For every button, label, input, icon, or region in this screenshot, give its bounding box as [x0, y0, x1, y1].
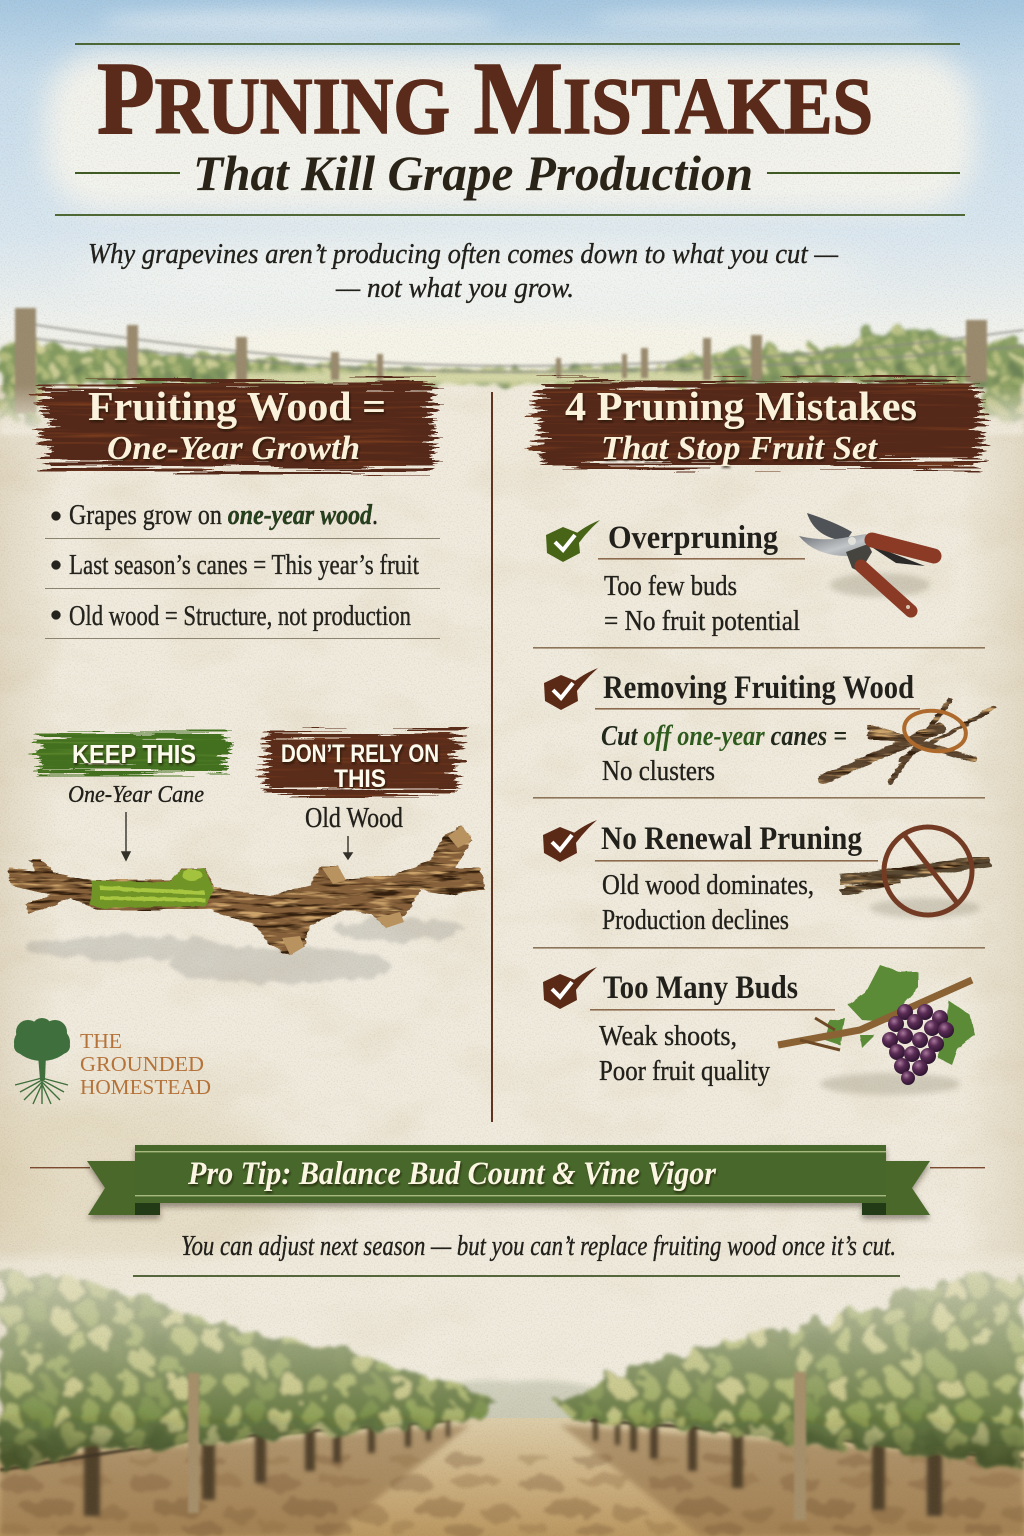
mistake 3: no renewal pruning: Old wood dominates, — [602, 870, 814, 901]
mistake 4: too many buds: Poor fruit quality — [599, 1056, 770, 1087]
illustration: branch with cane and old wood — [8, 826, 485, 983]
mistake 3: no renewal pruning: Production declines — [602, 905, 789, 936]
mistake 4: too many buds: Weak shoots, — [599, 1021, 737, 1052]
mistake 2: removing fruiting wood — [533, 668, 994, 799]
icon: tree — [14, 1018, 70, 1104]
banner: 4 pruning mistakes — [538, 382, 980, 467]
intro text: — not what you grow. — [335, 272, 574, 304]
bottom vineyard scene — [0, 1250, 1024, 1536]
label: one-year cane: One-Year Cane — [68, 782, 204, 808]
banner: fruiting wood: One-Year Growth — [107, 430, 360, 467]
arrow: to old wood — [344, 836, 352, 859]
centre divider — [491, 392, 493, 1122]
logo: the grounded homestead: HOMESTEAD — [80, 1075, 211, 1099]
mistake 4: too many buds: Too Many Buds — [603, 970, 798, 1006]
mistake 2: removing fruiting wood: Cut off one-year canes = — [601, 721, 847, 752]
mistake 2: removing fruiting wood: No clusters — [602, 756, 715, 787]
tag: keep this: KEEP THIS — [72, 739, 196, 769]
trellis wires — [0, 1420, 1024, 1470]
distant vines — [0, 325, 1024, 420]
trunks — [60, 1398, 972, 1516]
far hills — [420, 1380, 610, 1425]
icon: green check — [546, 520, 600, 562]
banner: fruiting wood: Fruiting Wood = — [88, 383, 386, 429]
logo: the grounded homestead: GROUNDED — [80, 1052, 204, 1076]
label: old wood: Old Wood — [305, 803, 403, 834]
tag: don't rely on this: THIS — [334, 765, 386, 793]
mistake 1: overpruning: = No fruit potential — [604, 606, 800, 637]
bullet list: Last season’s canes = This year’s fruit — [69, 550, 419, 581]
ground — [0, 1418, 1024, 1536]
mistake 2: removing fruiting wood: Removing Fruiting Wood — [603, 670, 914, 706]
icon: pruning shears — [799, 513, 934, 611]
sky background — [0, 0, 1024, 385]
mistake 4: too many buds — [543, 965, 975, 1095]
bullet list: Grapes grow on one-year wood. — [69, 500, 378, 531]
right column panel — [533, 382, 994, 1095]
right foliage — [555, 1277, 1024, 1470]
pro tip section — [30, 1145, 985, 1277]
logo: the grounded homestead: THE — [80, 1029, 122, 1053]
mistake 1: overpruning: Too few buds — [604, 571, 737, 602]
intro text: Why grapevines aren’t producing often comes down to what you cut — — [88, 238, 838, 270]
icon: brown check — [543, 967, 597, 1009]
distant vines and fence — [0, 308, 1024, 435]
banner: 4 pruning mistakes: 4 Pruning Mistakes — [565, 383, 917, 429]
tag: don't rely on this: DON’T RELY ON — [281, 740, 439, 768]
left column panel — [8, 382, 485, 1104]
banner: 4 pruning mistakes: That Stop Fruit Set — [601, 430, 879, 467]
icon: grape cluster on branch — [778, 965, 975, 1095]
intro text — [88, 238, 838, 304]
title block — [55, 41, 965, 216]
mistake 1: overpruning — [533, 513, 985, 649]
mistake 1: overpruning: Overpruning — [608, 520, 778, 556]
title: PRUNING MISTAKES — [97, 41, 873, 156]
trellis posts — [188, 1372, 806, 1520]
tag: don't rely on this — [266, 731, 458, 793]
left foliage — [0, 1270, 495, 1470]
bullet list: Old wood = Structure, not production — [69, 601, 411, 632]
icon: brown check — [543, 820, 597, 862]
ribbon banner: Pro Tip: Balance Bud Count & Vine Vigor — [187, 1156, 717, 1192]
green one-year cane section — [90, 868, 214, 908]
arrow: to cane — [122, 812, 130, 860]
mistake 3: no renewal pruning — [533, 820, 990, 949]
icon: brown check — [544, 668, 598, 710]
icon: no old wood symbol — [840, 827, 990, 918]
logo: the grounded homestead — [14, 1018, 211, 1104]
icon: cut canes — [822, 700, 994, 782]
mistake 3: no renewal pruning: No Renewal Pruning — [601, 821, 862, 857]
ribbon banner — [30, 1145, 985, 1215]
bullet list — [45, 500, 440, 639]
tag: keep this — [40, 733, 226, 773]
subtitle: That Kill Grape Production — [193, 145, 753, 201]
banner: fruiting wood — [43, 382, 433, 469]
